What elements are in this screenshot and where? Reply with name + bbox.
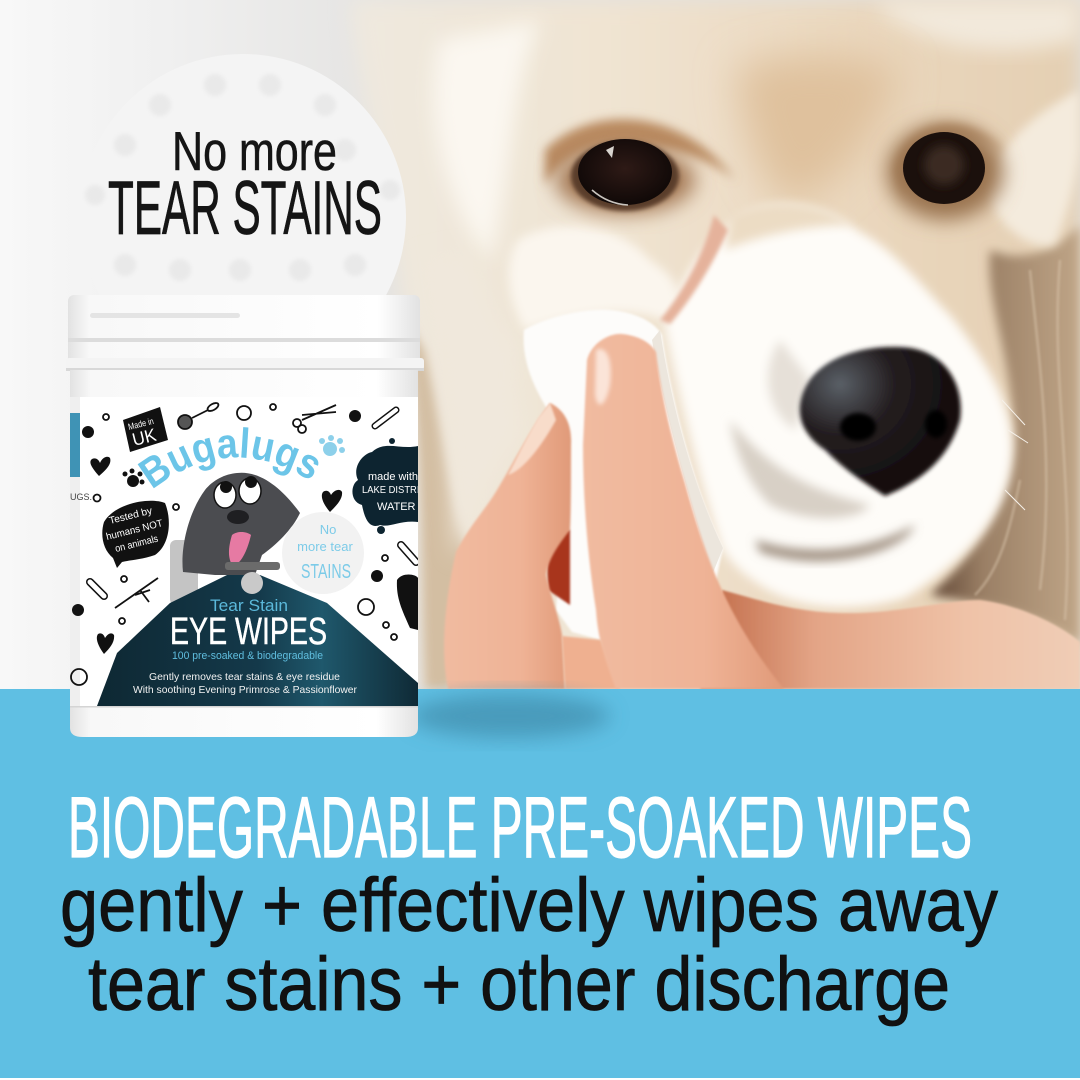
brand name: Bugalugs: [138, 427, 318, 488]
dog head fur: [350, 0, 1080, 689]
text: No more: No more: [172, 120, 337, 182]
Made in UK badge: [123, 407, 168, 452]
collar tag: [241, 572, 263, 594]
text: 100 pre-soaked: 100 pre-soaked & biodegradable: [172, 650, 323, 662]
left eye: [555, 139, 695, 214]
lake district ink splat: made with: [368, 471, 418, 483]
small no more tear stains disc: No: [320, 522, 336, 537]
lake district ink splat: [352, 438, 418, 534]
tested speech bubble: on animals: [114, 534, 159, 555]
hair strands right: [975, 260, 1067, 620]
small no more tear stains disc: more tear: [297, 539, 353, 554]
wipe cotton pad: [524, 310, 723, 640]
doodle icons: [71, 401, 397, 685]
thumb: [444, 403, 571, 689]
bone icons: [90, 410, 416, 596]
text: description: [133, 672, 357, 695]
body line 1: gently + effectively wipes away: [60, 863, 998, 948]
small no more tear stains disc: [282, 512, 364, 594]
tested speech bubble: humans NOT: [105, 518, 164, 543]
muzzle shading: [755, 525, 915, 561]
hand palm behind chin: [700, 590, 1080, 689]
dog illustration: [170, 473, 300, 605]
jar label: UGS.: [70, 492, 92, 502]
right eye: [887, 124, 1003, 220]
text: Tear Stain: Tear Stain: [210, 596, 288, 615]
hearts and flowers: [72, 410, 418, 654]
lake district ink splat: WATER: [377, 501, 416, 513]
tested speech bubble: [102, 501, 169, 568]
tear stain streak: [660, 215, 728, 324]
blue band: [0, 689, 1080, 1078]
lower finger below pad: [562, 636, 620, 689]
Made in UK badge: UK: [130, 425, 158, 450]
body line 2: tear stains + other discharge: [88, 942, 950, 1027]
jar body: [70, 370, 418, 737]
white muzzle: [665, 205, 1012, 607]
white cheek under left eye: [509, 226, 678, 330]
paw icons: [319, 435, 345, 456]
text: description: Gently removes tear stains & eye residue: [149, 671, 340, 683]
index finger: [583, 334, 784, 689]
nose: [800, 347, 961, 496]
jar label: [70, 397, 418, 706]
photo: dog having its eye wiped: [0, 0, 1080, 689]
hand fingers: [444, 334, 784, 689]
Made in UK badge: Made in: [127, 416, 155, 432]
small no more tear stains disc: STAINS: [301, 561, 351, 583]
whiskers: [1002, 400, 1028, 510]
jar shadow: [410, 694, 610, 738]
tested speech bubble: Tested by: [108, 506, 153, 527]
text: description: With soothing Evening Primrose & Passionflower: [133, 684, 357, 696]
lake district ink splat: LAKE DISTRICT: [362, 485, 432, 496]
wipe disc with headline: [87, 54, 406, 295]
right side long brown hair: [930, 225, 1080, 645]
product jar: [66, 295, 424, 737]
text: TEAR STAINS: TEAR STAINS: [108, 166, 382, 251]
cape: [97, 575, 418, 706]
text: EYE WIPES: EYE WIPES: [170, 611, 327, 653]
jar lid: [66, 295, 424, 371]
